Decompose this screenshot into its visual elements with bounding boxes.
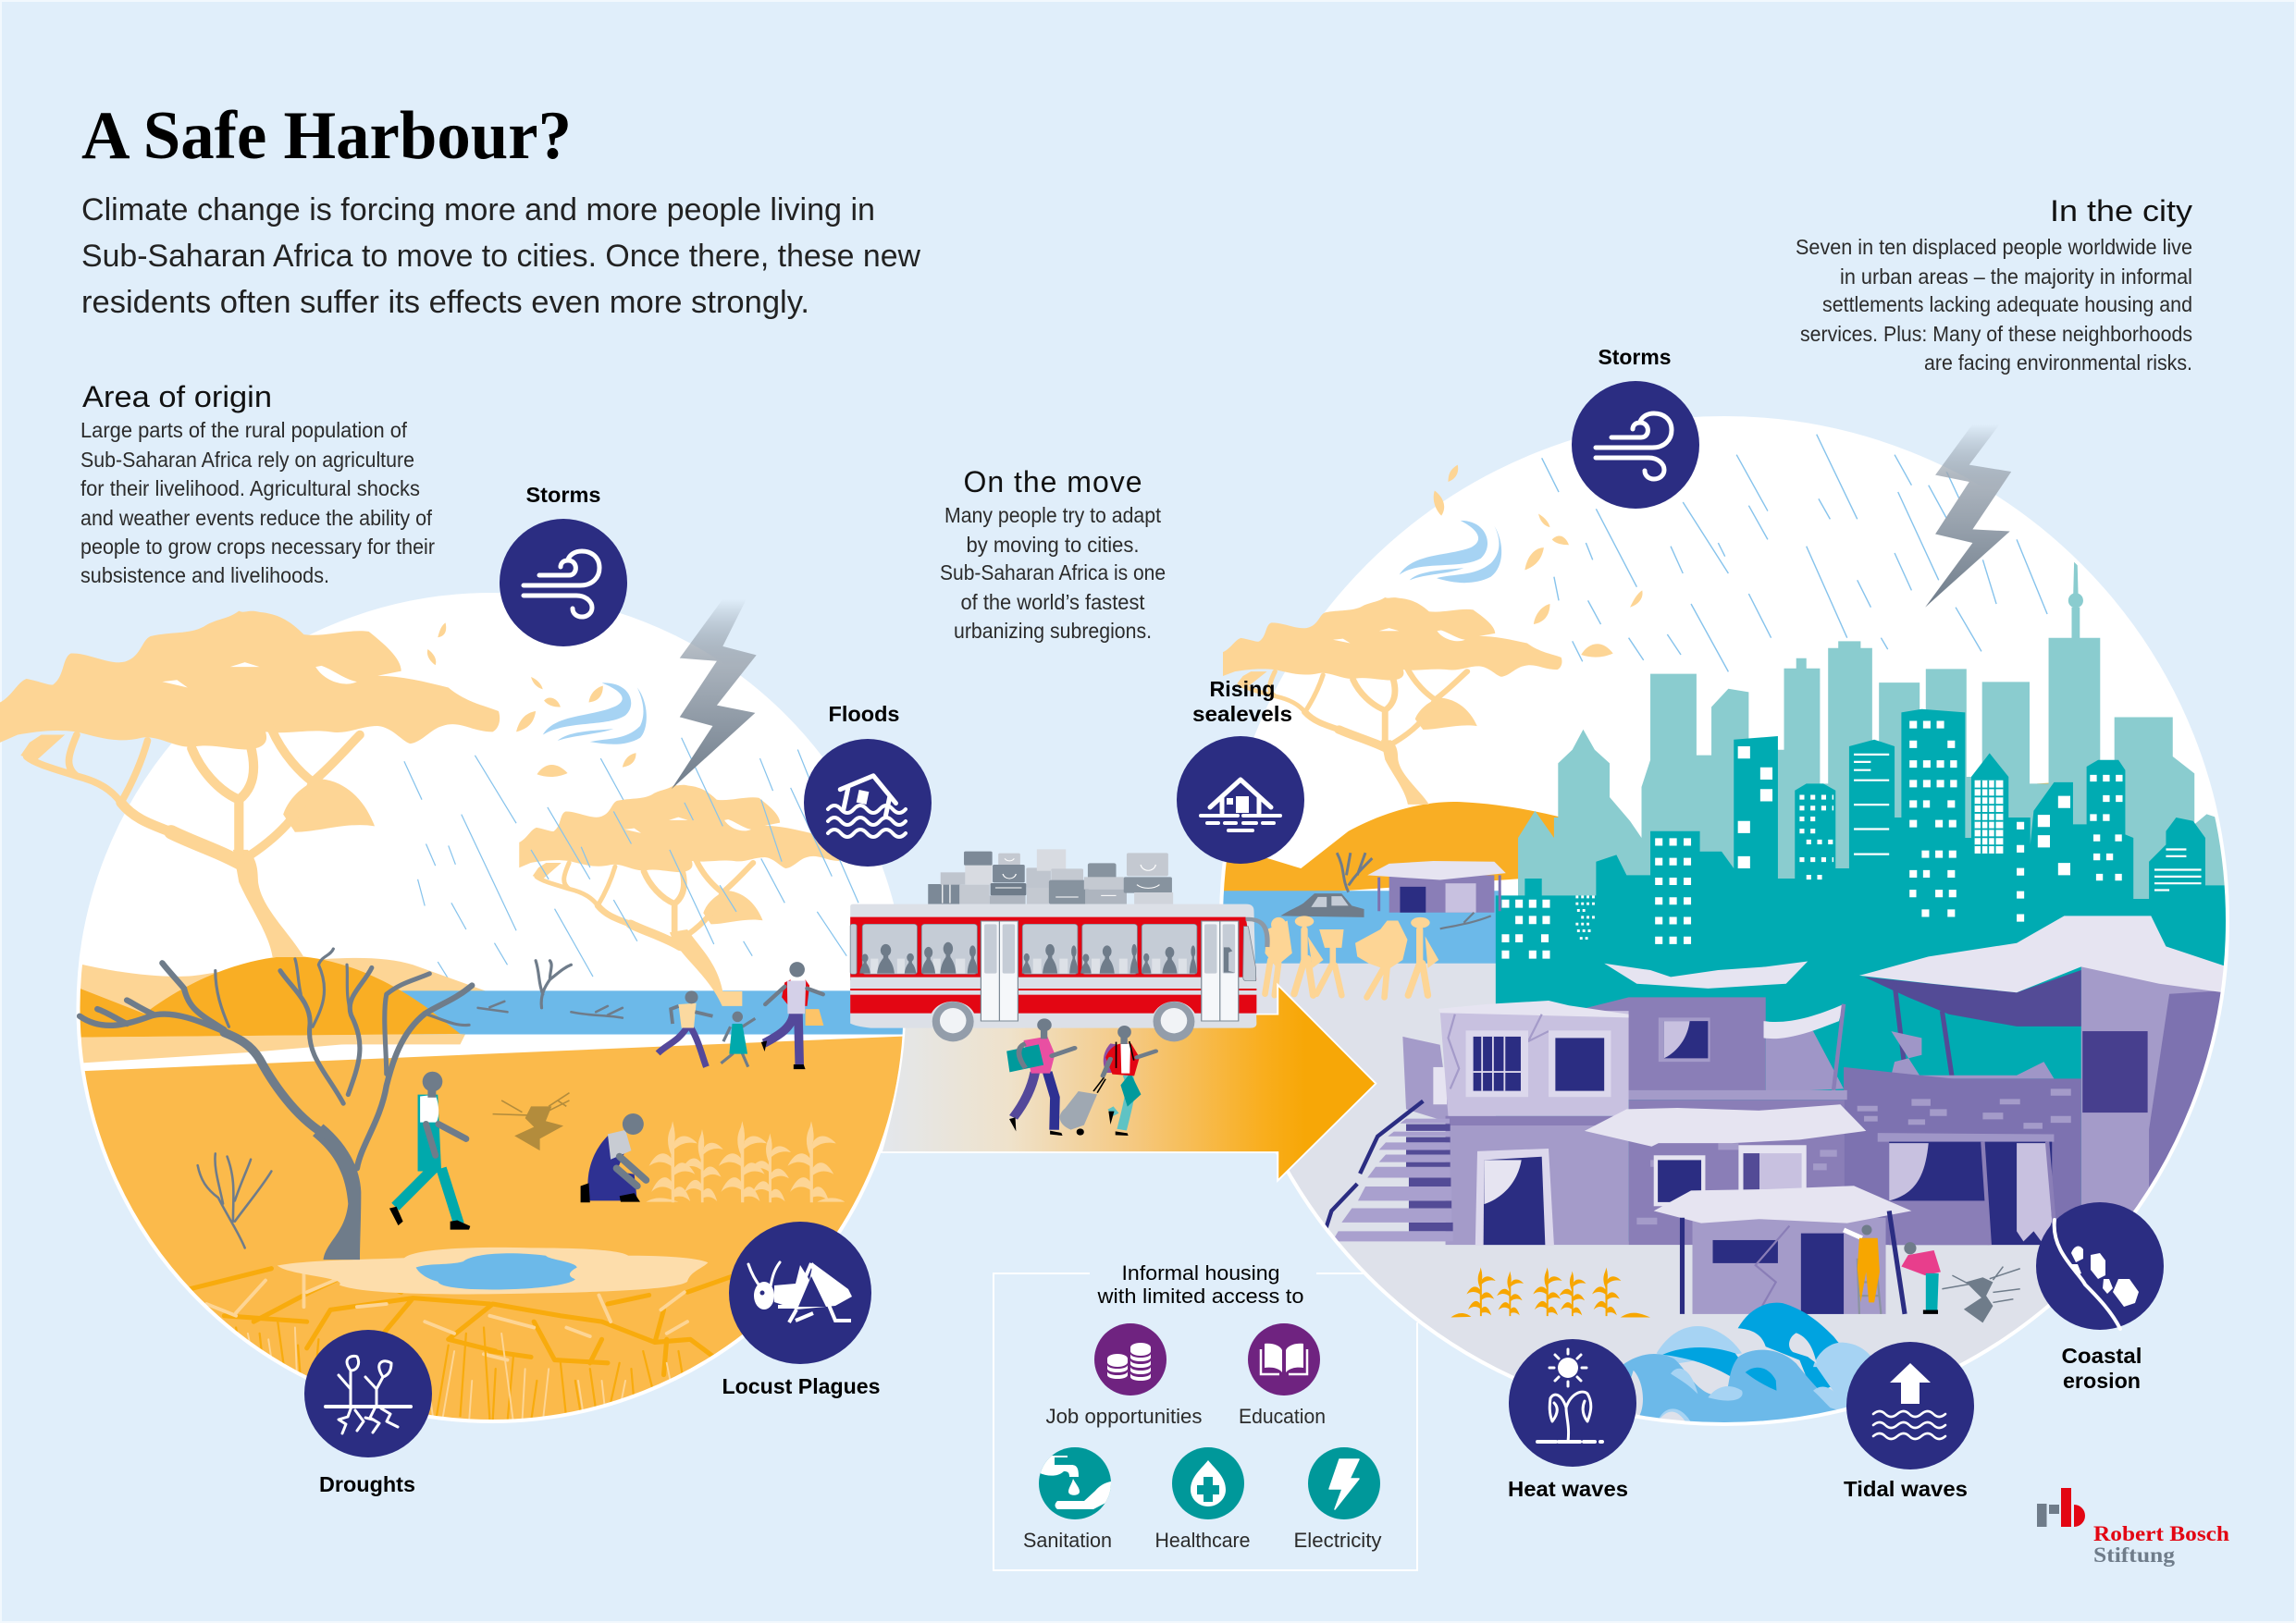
- left building: [1402, 1037, 1450, 1123]
- farmer walking: [389, 1072, 470, 1230]
- ground: [1255, 964, 2048, 1395]
- label: coastal erosion: erosion: [2063, 1369, 2141, 1393]
- stairs: [1326, 1101, 1453, 1241]
- panel: informal housing: [994, 1261, 1417, 1570]
- central lower building: [1624, 1090, 1847, 1100]
- text: area of origin: for their livelihood. Agricultural shocks: [80, 476, 420, 500]
- crops in front of slum: [1450, 1267, 1650, 1318]
- label: rising sea levels: Rising: [1210, 677, 1275, 701]
- distant dead tree: [1337, 853, 1372, 892]
- withered crop row: [646, 1121, 845, 1202]
- title: A Safe Harbour?: [81, 98, 572, 174]
- tower spire: [2073, 562, 2078, 594]
- front hill: [71, 956, 460, 1038]
- text: area of origin: Large parts of the rural population of: [80, 418, 408, 442]
- traveller in red: [1103, 1026, 1155, 1136]
- text: in the city: [1796, 235, 2192, 375]
- flooded car: [1280, 893, 1364, 917]
- logo: Robert Bosch Stiftung: Stiftung: [2093, 1543, 2176, 1567]
- rain over city: [1542, 435, 2047, 671]
- icon: floods: [804, 739, 932, 867]
- circle outline: countryside: [78, 595, 905, 1421]
- label: sanitation: Sanitation: [1023, 1529, 1112, 1552]
- bus windows: [850, 924, 1197, 974]
- waves: [1620, 1303, 1881, 1426]
- text: area of origin: people to grow crops necessary for their: [80, 535, 435, 559]
- label: education: Education: [1239, 1405, 1326, 1428]
- label: storms right: Storms: [1599, 345, 1671, 369]
- icon: droughts: [304, 1330, 432, 1457]
- circle outline: city: [1221, 418, 2228, 1424]
- rain over countryside: [404, 756, 631, 989]
- icon: locust plagues: [729, 1222, 871, 1364]
- falling leaves: [427, 622, 636, 777]
- fleeing mother: [761, 962, 823, 1069]
- migrants on foot: [1265, 916, 1438, 997]
- awning under big roof: [1864, 970, 2081, 1027]
- text: informal housing heading: Informal housing: [1121, 1261, 1280, 1285]
- text: on the move: of the world’s fastest: [960, 590, 1145, 614]
- heading: in the city: In the city: [2050, 194, 2192, 227]
- text: in the city: services. Plus: Many of these neighborhoods: [1800, 322, 2192, 346]
- icon: heat waves: [1509, 1339, 1636, 1467]
- bus body: [850, 904, 1256, 1028]
- log in water: [1440, 913, 1491, 928]
- text: informal housing heading line 2: with limited access to: [1096, 1285, 1304, 1308]
- intro text: Climate change is forcing more and more people living in: [81, 192, 875, 227]
- text: on the move: by moving to cities.: [966, 533, 1140, 557]
- text: in the city: Seven in ten displaced people worldwide live: [1796, 235, 2192, 259]
- bus with luggage: [850, 849, 1267, 1041]
- text: in the city: are facing environmental risks.: [1924, 350, 2192, 375]
- text: area of origin: Sub-Saharan Africa rely on agriculture: [80, 448, 414, 472]
- icon: healthcare: [1172, 1447, 1244, 1519]
- back skyline: [1518, 608, 2227, 913]
- large acacia tree: [0, 611, 500, 957]
- icon: rising sea levels: [1177, 736, 1304, 864]
- grey bare tree: [80, 949, 472, 1260]
- ground crack: [1942, 1267, 2020, 1322]
- text: in the city: in urban areas – the majority in informal: [1840, 264, 2192, 289]
- ruined wall: [1891, 1031, 2054, 1078]
- label: tidal waves: Tidal waves: [1844, 1477, 1968, 1501]
- sand band: [71, 1034, 466, 1064]
- label: electricity: Electricity: [1293, 1529, 1382, 1552]
- fleeing runner: [658, 990, 712, 1067]
- front shack: [1693, 1218, 1886, 1314]
- acacia tree: city: [1223, 597, 1562, 805]
- label: locust plagues: Locust Plagues: [722, 1374, 881, 1398]
- cracked soil and dry grass: [189, 1266, 737, 1422]
- icon: storms right: [1572, 381, 1699, 509]
- logo: Robert Bosch Stiftung: Robert Bosch: [2093, 1522, 2229, 1545]
- label: coastal erosion: [2061, 1344, 2142, 1393]
- doors: [981, 919, 1267, 1021]
- water: [401, 990, 920, 1035]
- dead trees and logs: [478, 961, 623, 1018]
- right tower: [2081, 967, 2215, 1211]
- label: job opportunities: Job opportunities: [1045, 1405, 1203, 1428]
- logo: Robert Bosch Stiftung: [2037, 1488, 2229, 1567]
- label: rising sea levels: sealevels: [1192, 702, 1292, 726]
- intro text: residents often suffer its effects even more strongly.: [81, 285, 809, 320]
- city windows: [1501, 725, 2202, 954]
- rolling suitcase: [1060, 1077, 1105, 1136]
- wheels: [929, 1002, 1199, 1041]
- seats: [870, 959, 1187, 974]
- luggage pile: [928, 849, 1173, 904]
- dry pond: [278, 1248, 708, 1294]
- rain over small tree: [531, 738, 858, 956]
- panel: rural scene in left circle: [0, 595, 920, 1440]
- intro text: [81, 192, 920, 320]
- teal city: [1496, 709, 2234, 1241]
- label: storms left: Storms: [525, 483, 601, 507]
- small bare bush: [198, 1153, 271, 1248]
- icon: storms left: [500, 519, 627, 646]
- text: area of origin: subsistence and livelihoods.: [80, 563, 329, 587]
- water: [1203, 891, 1501, 965]
- hill behind city: [1224, 782, 2049, 891]
- lightning: city: [1925, 424, 2011, 608]
- lightning: [672, 599, 757, 789]
- grid building: [1975, 781, 2003, 854]
- fleeing child: [721, 1012, 755, 1067]
- back hill: [71, 958, 487, 1044]
- icon: electricity: [1308, 1447, 1380, 1519]
- icon: sanitation: [1038, 1447, 1117, 1519]
- icon: education: [1248, 1323, 1320, 1396]
- falling leaves: city: [1434, 465, 1643, 658]
- label: coastal erosion: Coastal: [2061, 1344, 2142, 1368]
- label: heat waves: Heat waves: [1508, 1477, 1628, 1501]
- painter on ladder: [1844, 1224, 1881, 1314]
- travellers with luggage: [1006, 1018, 1155, 1136]
- traveller in pink: [1006, 1018, 1075, 1136]
- text: on the move: urbanizing subregions.: [954, 619, 1152, 643]
- central upper building: [1574, 997, 1766, 1092]
- icon: coastal erosion: [2036, 1202, 2164, 1330]
- label: rising sea levels: [1192, 677, 1292, 726]
- text: on the move: [940, 503, 1166, 643]
- icon: tidal waves: [1846, 1342, 1974, 1469]
- passengers: [859, 942, 1197, 974]
- awning middle: [1585, 1104, 1866, 1147]
- text: in the city: settlements lacking adequate housing and: [1822, 292, 2192, 316]
- icon: job opportunities: [1094, 1323, 1167, 1396]
- panel: city scene in right circle: [1219, 416, 2229, 1426]
- cracked ground mark: [493, 1093, 569, 1150]
- label: healthcare: Healthcare: [1154, 1529, 1251, 1552]
- text: on the move: Sub-Saharan Africa is one: [940, 560, 1166, 584]
- heading: on the move: On the move: [964, 465, 1142, 498]
- distant house: [1367, 861, 1506, 913]
- text: area of origin: [80, 418, 435, 587]
- builder with pink shirt: [1901, 1242, 1941, 1314]
- label: droughts: Droughts: [319, 1472, 415, 1496]
- text: on the move: Many people try to adapt: [944, 503, 1162, 527]
- text: area of origin: and weather events reduce the ability of: [80, 506, 433, 530]
- heading: area of origin: Area of origin: [82, 380, 272, 413]
- field: [71, 1036, 920, 1440]
- arrow: migration direction: [882, 985, 1376, 1181]
- small acacia tree: [519, 785, 844, 1006]
- label: floods: Floods: [829, 702, 899, 726]
- wind swoosh: city: [1400, 521, 1501, 583]
- big torn roof: [1859, 916, 2227, 992]
- wind swoosh: [543, 682, 647, 744]
- farmer kneeling: [581, 1113, 646, 1202]
- intro text: Sub-Saharan Africa to move to cities. Once there, these new: [81, 239, 920, 274]
- brick wall: [1844, 1067, 2081, 1245]
- recessed shop: [1878, 1133, 2054, 1142]
